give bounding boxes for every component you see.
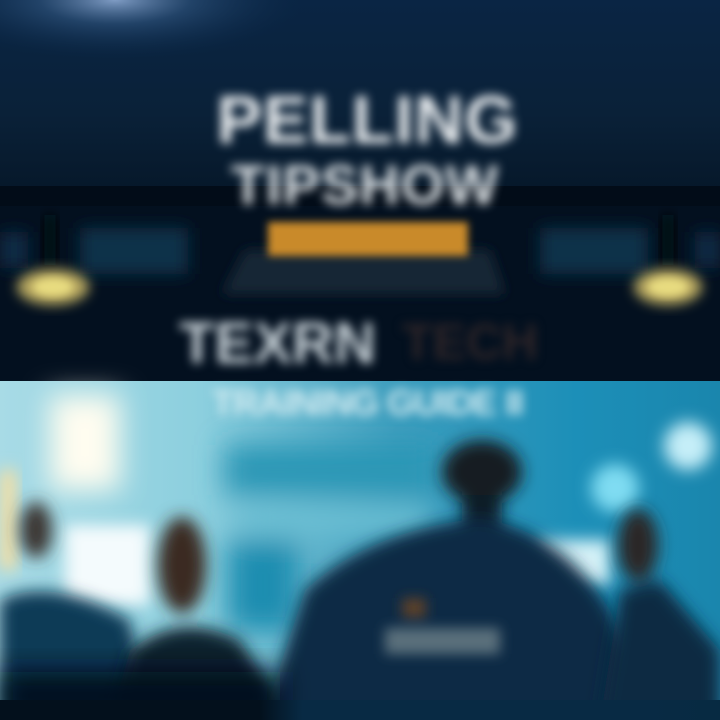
figure: second person <box>110 517 290 720</box>
subtitle line: TIPSHOW <box>231 153 499 216</box>
title: PELLING <box>217 82 518 158</box>
heading: white: TEXRN <box>179 311 376 376</box>
figure: right person <box>600 509 720 720</box>
panel: centre teal screen <box>225 445 435 630</box>
panel: right bright spots <box>535 422 712 585</box>
floor strip <box>0 700 720 720</box>
text block: caption row: TRAINING GUIDE II <box>212 382 523 423</box>
panel: left bright window <box>50 395 120 490</box>
foreground bottom shadow <box>0 672 280 720</box>
heading: dark orange: TECH <box>402 314 538 370</box>
panel: left bright screen <box>65 525 150 605</box>
figure: central person <box>262 440 660 720</box>
panel: far left warm light <box>0 470 16 570</box>
lower left dark figure <box>0 502 150 720</box>
logo on jacket <box>385 598 500 654</box>
